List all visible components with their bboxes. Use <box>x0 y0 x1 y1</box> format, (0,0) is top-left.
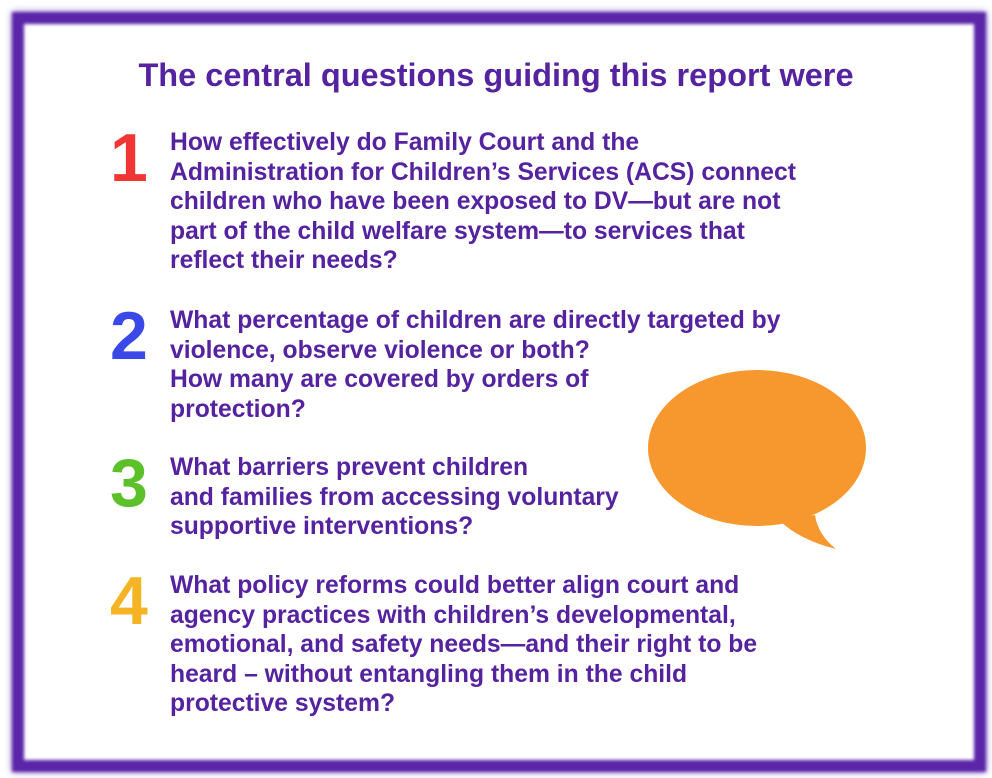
question 4 text: emotional, and safety needs—and their right to be <box>170 631 757 658</box>
question 3 text: and families from accessing voluntary <box>170 484 619 511</box>
icon: speech bubble <box>648 370 866 549</box>
question 1 text: reflect their needs? <box>170 247 398 274</box>
number 4: 4 <box>110 563 148 639</box>
question 2 text: protection? <box>170 396 306 423</box>
question 1 text: Administration for Children’s Services (ACS) connect <box>170 159 796 186</box>
question 4 text: heard – without entangling them in the child <box>170 661 687 688</box>
number 1: 1 <box>110 120 148 196</box>
question 1 text: part of the child welfare system—to services that <box>170 218 745 245</box>
question 4 text: What policy reforms could better align court and <box>170 572 739 599</box>
question 3 text: supportive interventions? <box>170 513 473 540</box>
question 4 text <box>170 572 757 717</box>
question 1 text: children who have been exposed to DV—but are not <box>170 188 780 215</box>
question 1 text: How effectively do Family Court and the <box>170 129 639 156</box>
question 2 text: violence, observe violence or both? <box>170 337 590 364</box>
item 2 <box>110 298 780 423</box>
item 3 <box>110 445 619 540</box>
title: The central questions guiding this report were <box>138 57 854 93</box>
question 4 text: protective system? <box>170 690 395 717</box>
question 1 text <box>170 129 796 274</box>
number 2: 2 <box>110 298 148 374</box>
question 2 text: What percentage of children are directly targeted by <box>170 307 780 334</box>
question 2 text: How many are covered by orders of <box>170 366 588 393</box>
item 1 <box>110 120 796 274</box>
question 4 text: agency practices with children’s developmental, <box>170 602 736 629</box>
question 2 text <box>170 307 780 423</box>
question 3 text <box>170 454 619 540</box>
item 4 <box>110 563 757 717</box>
question 3 text: What barriers prevent children <box>170 454 528 481</box>
number 3: 3 <box>110 445 148 521</box>
